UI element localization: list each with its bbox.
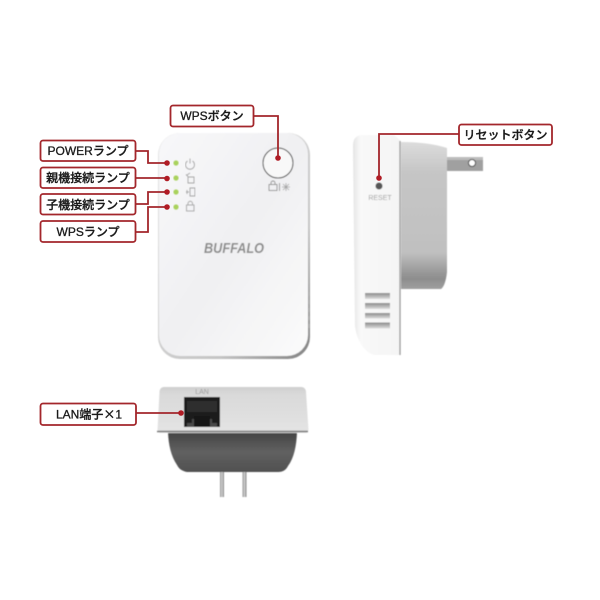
callout: reset button: リセットボタン [463, 128, 548, 142]
logo: BUFFALO: BUFFALO [204, 241, 265, 257]
reset text: RESET [368, 195, 392, 202]
top plate [158, 387, 308, 433]
callout: reset button [376, 124, 552, 181]
callout: WPS lamp: WPSランプ [57, 225, 119, 239]
icons: lamp symbols [186, 158, 195, 211]
device: side view [353, 135, 483, 355]
vents [365, 293, 390, 328]
icon: lock and sun marks [269, 181, 290, 191]
device: bottom view [157, 387, 308, 497]
side vent marks [308, 292, 310, 328]
callout: POWER lamp: POWERランプ [48, 144, 128, 158]
WPS button ring [263, 148, 293, 178]
rear housing [401, 142, 447, 289]
callout: WPS button: WPSボタン [180, 109, 244, 123]
front plate [353, 135, 401, 355]
device: front view [158, 133, 310, 359]
callout: parent connection lamp [40, 168, 170, 188]
callout: WPS button [170, 106, 281, 161]
callout: WPS lamp [40, 204, 170, 242]
plug pins [220, 472, 246, 497]
dark housing [168, 432, 297, 472]
callout: LAN port [40, 404, 184, 425]
callout: POWER lamp [40, 140, 170, 166]
callout: parent connection lamp: 親機接続ランプ [46, 170, 130, 185]
plug prong [446, 157, 483, 171]
LAN port [184, 397, 220, 427]
status LEDs [173, 160, 179, 210]
callout: child connection lamp [40, 189, 170, 214]
callout: child connection lamp: 子機接続ランプ [46, 197, 130, 212]
reset hole [376, 182, 382, 190]
callout: LAN port: LAN端子×1 [56, 406, 122, 422]
LAN text: LAN [195, 389, 209, 396]
